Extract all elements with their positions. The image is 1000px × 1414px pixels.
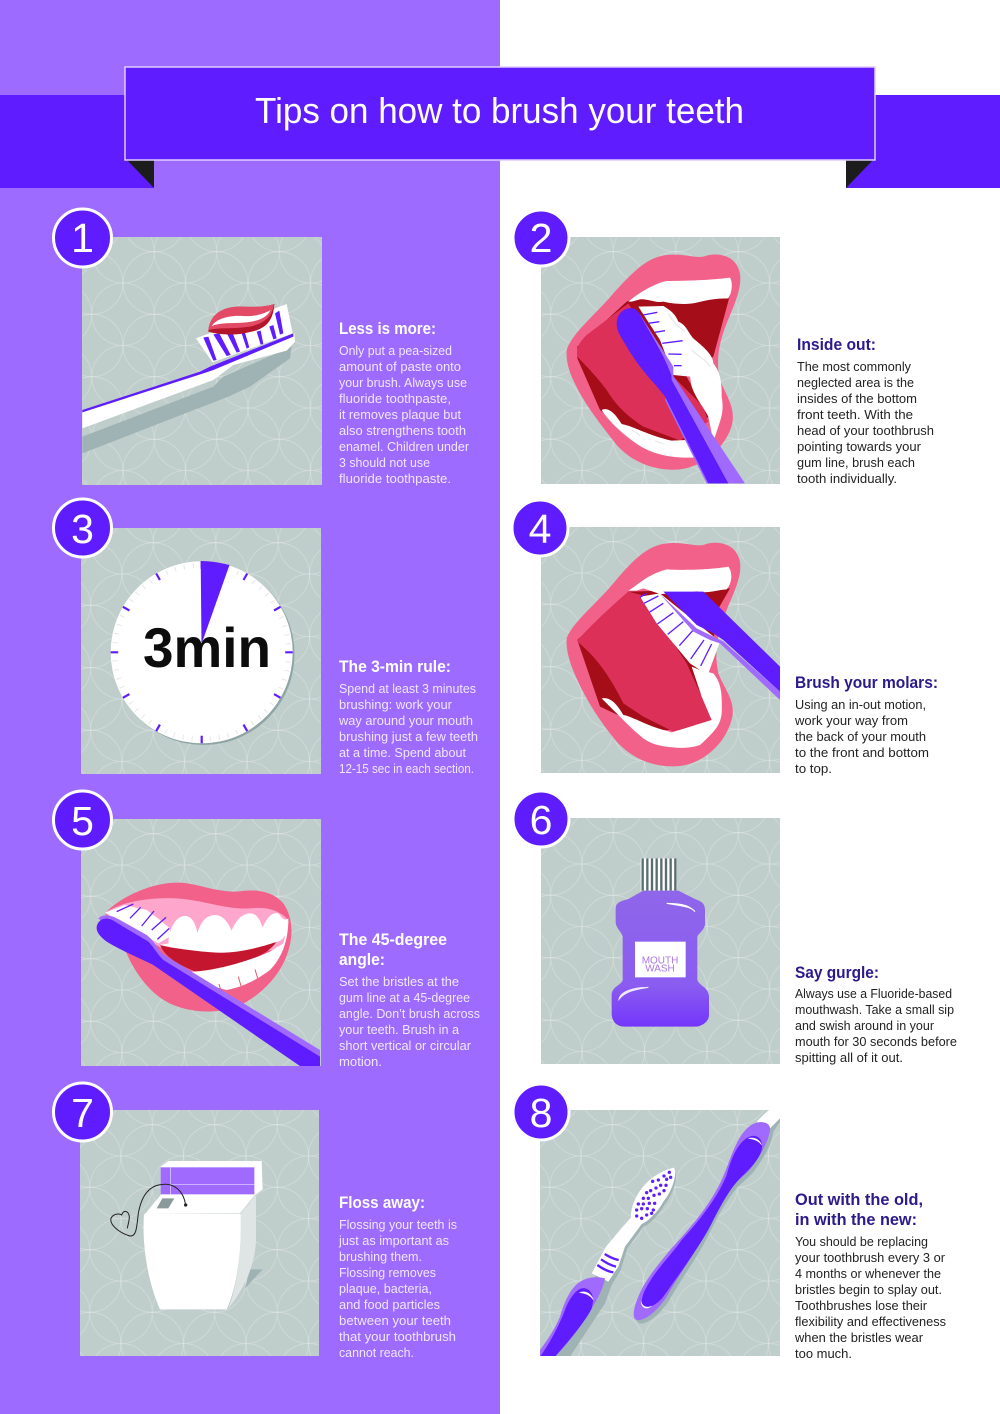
panel: step 2 illustration, brushing inside of teeth [541,237,780,484]
text: the 3-min rule: brushing: work your [339,698,452,712]
text: inside out: insides of the bottom [797,392,917,406]
step 8 number badge: 8 [530,1090,552,1136]
timer shadow [112,563,294,745]
bottle cap [641,858,677,891]
text: say gurgle: and swish around in your [795,1019,934,1033]
text: floss away: and food particles [339,1298,440,1312]
text: floss away: cannot reach. [339,1346,414,1360]
text: less is more: fluoride toothpaste. [339,472,451,486]
text: floss away: just as important as [338,1234,449,1248]
text: the 3-min rule: Spend at least 3 minutes [339,682,476,696]
text: the 45-degree angle: The 45-degree [339,930,447,949]
text: less is more: fluoride toothpaste, [339,392,451,406]
text: brush your molars [794,673,938,776]
text: floss away: brushing them. [339,1250,422,1264]
text: out with the old, in with the new: You should be replacing [795,1235,928,1249]
text: the 45-degree angle: motion. [339,1055,382,1069]
panel: step 6 illustration, mouthwash bottle [541,818,780,1064]
step 7 number badge [54,1083,112,1141]
title: Tips on how to brush your teeth [255,90,744,131]
text: out with the old, in with the new [794,1190,946,1361]
text: say gurgle [795,963,957,1065]
bottle label: MOUTH [642,955,678,966]
text: say gurgle: Say gurgle: [795,963,879,982]
old toothbrush [540,1168,676,1357]
text: less is more: 3 should not use [339,456,430,470]
text: the 3-min rule: way around your mouth [338,714,473,728]
text: brush your molars: work your way from [794,714,908,728]
step 8 number badge [513,1084,569,1140]
text: the 45-degree angle: gum line at a 45-degree [339,991,470,1005]
step 4 number badge: 4 [529,506,551,552]
text: floss away: that your toothbrush [339,1330,456,1344]
text: say gurgle: Always use a Fluoride-based [795,987,952,1001]
text: the 45-degree angle: Set the bristles at the [339,975,459,989]
text: less is more: Only put a pea-sized [339,344,452,358]
title banner [0,67,1000,188]
step 2 number badge [513,210,569,266]
panel: step 3 illustration, three minute timer [81,528,321,774]
text: inside out: tooth individually. [797,472,897,486]
text: the 3-min rule [338,657,478,776]
text: out with the old, in with the new: Toothbrushes lose their [795,1299,927,1313]
text: say gurgle: mouth for 30 seconds before [795,1035,957,1049]
text: the 45-degree angle [339,930,480,1069]
step 4 number badge [512,500,568,556]
text: inside out: Inside out: [797,335,876,354]
bottle label [635,942,686,977]
text: out with the old, in with the new: your toothbrush every 3 or [795,1251,945,1265]
text: out with the old, in with the new: in with the new: [795,1210,917,1229]
text: less is more [339,319,469,486]
text: less is more: your brush. Always use [339,376,467,390]
text: inside out: front teeth. With the [797,408,913,422]
text: less is more: it removes plaque but [339,408,461,422]
new toothbrush [634,1109,783,1323]
text: say gurgle: mouthwash. Take a small sip [795,1003,954,1017]
text: the 3-min rule: at a time. Spend about [339,746,466,760]
step 7 number badge: 7 [71,1090,94,1136]
text: brush your molars: the back of your mouth [795,730,926,744]
text: the 45-degree angle: short vertical or circular [339,1039,471,1053]
text: out with the old, in with the new: when the bristles wear [794,1331,923,1345]
text: brush your molars: to top. [795,762,832,776]
step 6 number badge [513,791,569,847]
text: out with the old, in with the new: too much. [795,1347,852,1361]
step 2 number badge: 2 [530,215,552,261]
panel: step 5 illustration, 45 degree brushing [81,819,321,1066]
text: brush your molars: Brush your molars: [795,673,938,692]
text: inside out [797,335,934,486]
timer face [111,561,293,743]
text: the 45-degree angle: your teeth. Brush in a [339,1023,459,1037]
text: less is more: Less is more: [339,319,436,338]
text: the 3-min rule: brushing just a few teeth [339,730,478,744]
timer label: 3min [143,616,271,679]
step 3 number badge [54,499,112,557]
text: inside out: head of your toothbrush [797,424,934,438]
text: less is more: amount of paste onto [339,360,461,374]
text: inside out: gum line, brush each [797,456,915,470]
timer ticks [111,561,293,743]
text: less is more: also strengthens tooth [339,424,466,438]
text: brush your molars: Using an in-out motion, [795,698,926,712]
text: floss away: between your teeth [339,1314,451,1328]
text: the 3-min rule: 12-15 sec in each section. [339,762,474,776]
text: brush your molars: to the front and bottom [795,746,929,760]
step 6 number badge: 6 [530,797,552,843]
background: purple left half [0,0,500,1414]
text: out with the old, in with the new: flexibility and effectiveness [795,1315,946,1329]
step 1 number badge: 1 [71,215,94,261]
text: out with the old, in with the new: bristles begin to splay out. [795,1283,942,1297]
text: the 45-degree angle: angle: [339,950,385,969]
timer wedge [201,561,230,644]
step 5 number badge [54,791,112,849]
step 3 number badge: 3 [71,506,94,552]
bottle body [612,891,709,1027]
text: floss away: plaque, bacteria, [339,1282,432,1296]
text: floss away: Flossing removes [339,1266,436,1280]
panel: step 8 illustration, old and new toothbrushes [540,1109,783,1357]
panel: step 1 illustration, toothbrush with paste [82,237,322,485]
text: floss away [338,1193,457,1360]
text: the 3-min rule: The 3-min rule: [339,657,451,676]
text: the 45-degree angle: angle. Don’t brush across [339,1007,480,1021]
text: out with the old, in with the new: 4 months or whenever the [795,1267,941,1281]
panel: step 4 illustration, brushing molars [541,527,780,773]
text: say gurgle: spitting all of it out. [795,1051,903,1065]
text: less is more: enamel. Children under [339,440,469,454]
text: floss away: Floss away: [339,1193,425,1212]
text: inside out: pointing towards your [797,440,921,454]
step 1 number badge [54,209,112,267]
bottle label: WASH [645,963,675,974]
text: floss away: Flossing your teeth is [339,1218,457,1232]
text: inside out: neglected area is the [797,376,914,390]
step 5 number badge: 5 [71,798,94,844]
text: inside out: The most commonly [797,360,912,374]
text: out with the old, in with the new: Out with the old, [795,1190,923,1209]
panel: step 7 illustration, dental floss box [80,1110,319,1356]
